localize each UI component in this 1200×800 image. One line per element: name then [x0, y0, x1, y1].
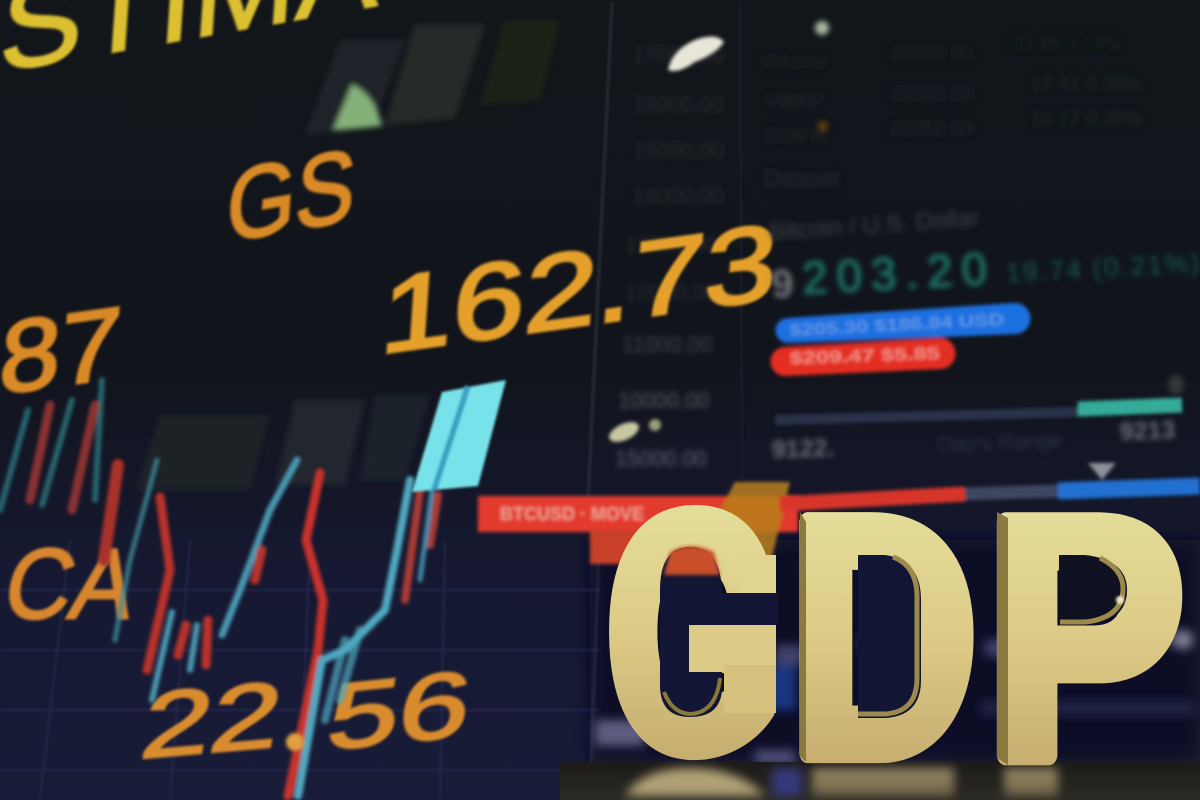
price panel text: 10.17 0.28% [1030, 108, 1143, 130]
price panel text: 203.20 [801, 242, 988, 304]
axis labels column: 13000.00 [625, 232, 717, 257]
axis labels column: 15000.00 [615, 446, 707, 471]
blue and red pills [770, 303, 1031, 376]
axis labels column: 15000.00 [632, 138, 724, 163]
price panel text [760, 21, 1200, 464]
axis labels column: 17000.00 [632, 42, 724, 67]
price panel text: Volume [760, 51, 827, 73]
lower right blurred rows [595, 575, 1195, 764]
price panel text: 21052.80 [890, 118, 973, 140]
price panel text: 9 [770, 262, 795, 307]
red ticker bar [478, 482, 798, 566]
small glare [606, 418, 661, 446]
gold GDP letters [608, 450, 1183, 800]
ticker: GS: GS [223, 126, 359, 264]
chart grid panel [0, 2, 742, 798]
horizontal red line [0, 516, 480, 520]
price panel text: Bitcoin / U.S. Dollar [769, 204, 980, 246]
candlestick chart [0, 380, 438, 796]
range bars [775, 405, 1200, 504]
price panel text: 19.74 (0.21%) [1005, 248, 1200, 288]
ticker: 22: 22 [135, 661, 289, 778]
axis labels column: 11000.00 [622, 332, 712, 357]
window reflections [135, 20, 560, 490]
price panel text: 52W H [765, 125, 826, 147]
price panel text: 9213 [1119, 416, 1176, 446]
price panel text: 26503.58 [890, 43, 973, 65]
axis labels column: 16000.00 [632, 92, 724, 117]
red ticker bar: BTCUSD · MOVE [500, 504, 644, 524]
price panel text: 12.41 0.35% [1030, 73, 1143, 95]
price panel text: 20503.58 [890, 83, 973, 105]
price panel text: 10.28 0.12% [1010, 33, 1123, 55]
axis labels column: 14000.00 [632, 183, 724, 208]
floor reflection [560, 762, 1200, 800]
blue and red pills: $205.30 $186.84 USD [789, 310, 1005, 340]
price panel text: Dataset [764, 166, 840, 191]
axis labels column [615, 42, 724, 471]
cyan large candle [412, 380, 506, 492]
price panel text: VWAP [765, 91, 823, 113]
price panel text: 9122. [771, 434, 835, 464]
ticker: 56: 56 [321, 650, 478, 770]
blue and red pills: $209.47 $5.85 [789, 344, 940, 368]
ticker: 162.73: 162.73 [377, 200, 781, 377]
chart highlight dot [286, 733, 304, 751]
lower right screen panel [590, 540, 1200, 762]
axis labels column: 10000.00 [618, 388, 710, 413]
highlight: white glare [668, 36, 724, 71]
axis labels column: 12000.00 [625, 280, 717, 305]
price panel text: Day's Range [937, 428, 1063, 457]
